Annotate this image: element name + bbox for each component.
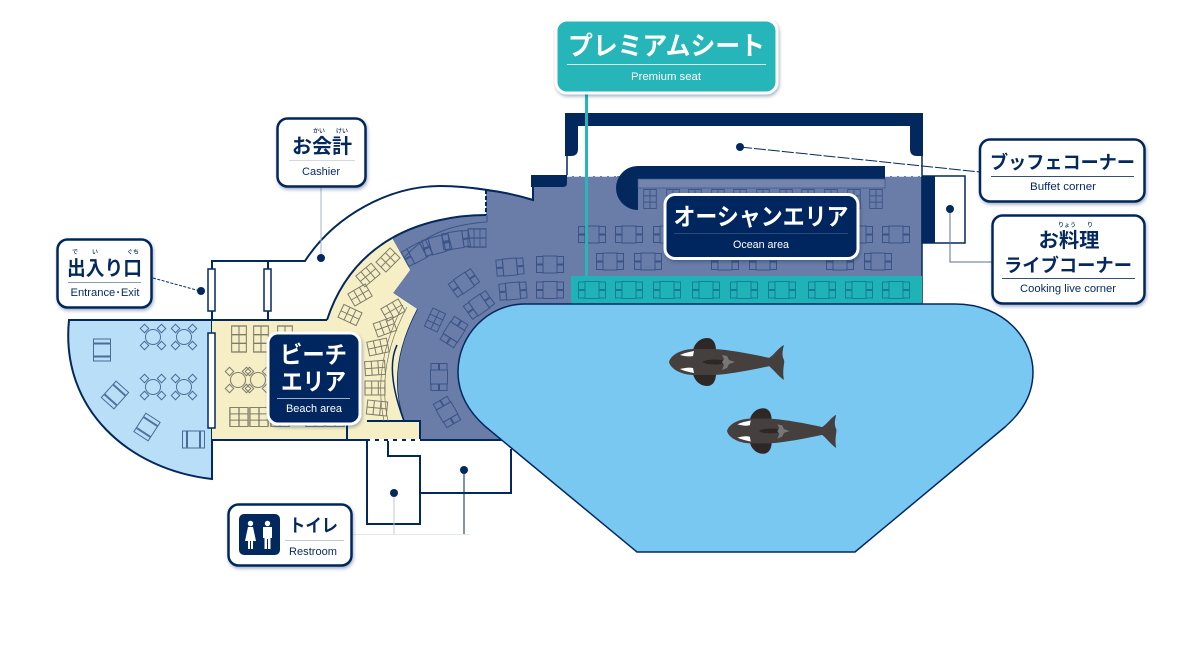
label: cooking live corner: Cooking live corner	[1020, 283, 1116, 295]
orca 1	[669, 338, 784, 386]
premium seats	[578, 282, 910, 298]
label: cashier: お会計	[292, 130, 352, 159]
label: premium seat: プレミアムシート	[568, 26, 765, 63]
label: ocean area: Ocean area	[733, 239, 790, 251]
label: cooking live corner: り	[1087, 220, 1093, 229]
pool	[458, 304, 1033, 552]
ocean area floor	[392, 176, 922, 440]
terrace seating area	[68, 320, 212, 479]
label: restroom: Restroom	[289, 546, 337, 558]
label: restroom	[228, 504, 352, 566]
icon: restroom figures	[239, 514, 280, 555]
label: premium seat: Premium seat	[631, 71, 701, 83]
label: entrance exit: Entrance･Exit	[70, 287, 140, 299]
label: entrance exit: で	[72, 247, 78, 256]
label: cooking live corner: りょう	[1058, 220, 1076, 229]
ocean area seats	[401, 190, 910, 428]
label: buffet corner: Buffet corner	[1030, 181, 1096, 193]
label: entrance exit: 出入り口	[67, 252, 142, 281]
label: buffet corner: ブッフェコーナー	[990, 149, 1135, 175]
doors	[208, 269, 271, 428]
premium seat strip	[571, 276, 922, 304]
orca 2	[727, 408, 836, 454]
label: entrance exit	[58, 240, 152, 308]
restroom rooms	[367, 440, 511, 524]
label: cooking live corner: お料理	[1038, 224, 1100, 253]
label: buffet corner	[980, 140, 1144, 202]
label: beach area: Beach area	[286, 403, 343, 415]
label: beach area	[268, 333, 360, 424]
marker dots	[197, 143, 954, 497]
building outline	[212, 186, 533, 333]
label: cashier: かい	[313, 126, 325, 135]
buffet corner walls	[531, 113, 923, 210]
label: beach area: エリア	[281, 362, 346, 397]
label: ocean area: オーシャンエリア	[674, 197, 848, 232]
label: cooking live corner: ライブコーナー	[1004, 252, 1132, 278]
label: restroom: トイレ	[289, 512, 338, 538]
label: entrance exit: ぐち	[127, 247, 139, 256]
label: premium seat	[556, 20, 777, 93]
label: cashier: けい	[336, 126, 348, 135]
label: cashier: Cashier	[302, 166, 340, 178]
cooking live corner room	[922, 176, 965, 243]
label: ocean area	[665, 194, 858, 258]
label: entrance exit: い	[92, 247, 98, 256]
connector lines	[153, 92, 992, 535]
label: cashier	[278, 118, 366, 186]
beach area floor	[212, 238, 420, 440]
label: cooking live corner	[992, 216, 1144, 304]
label: beach area: ビーチ	[280, 335, 347, 370]
